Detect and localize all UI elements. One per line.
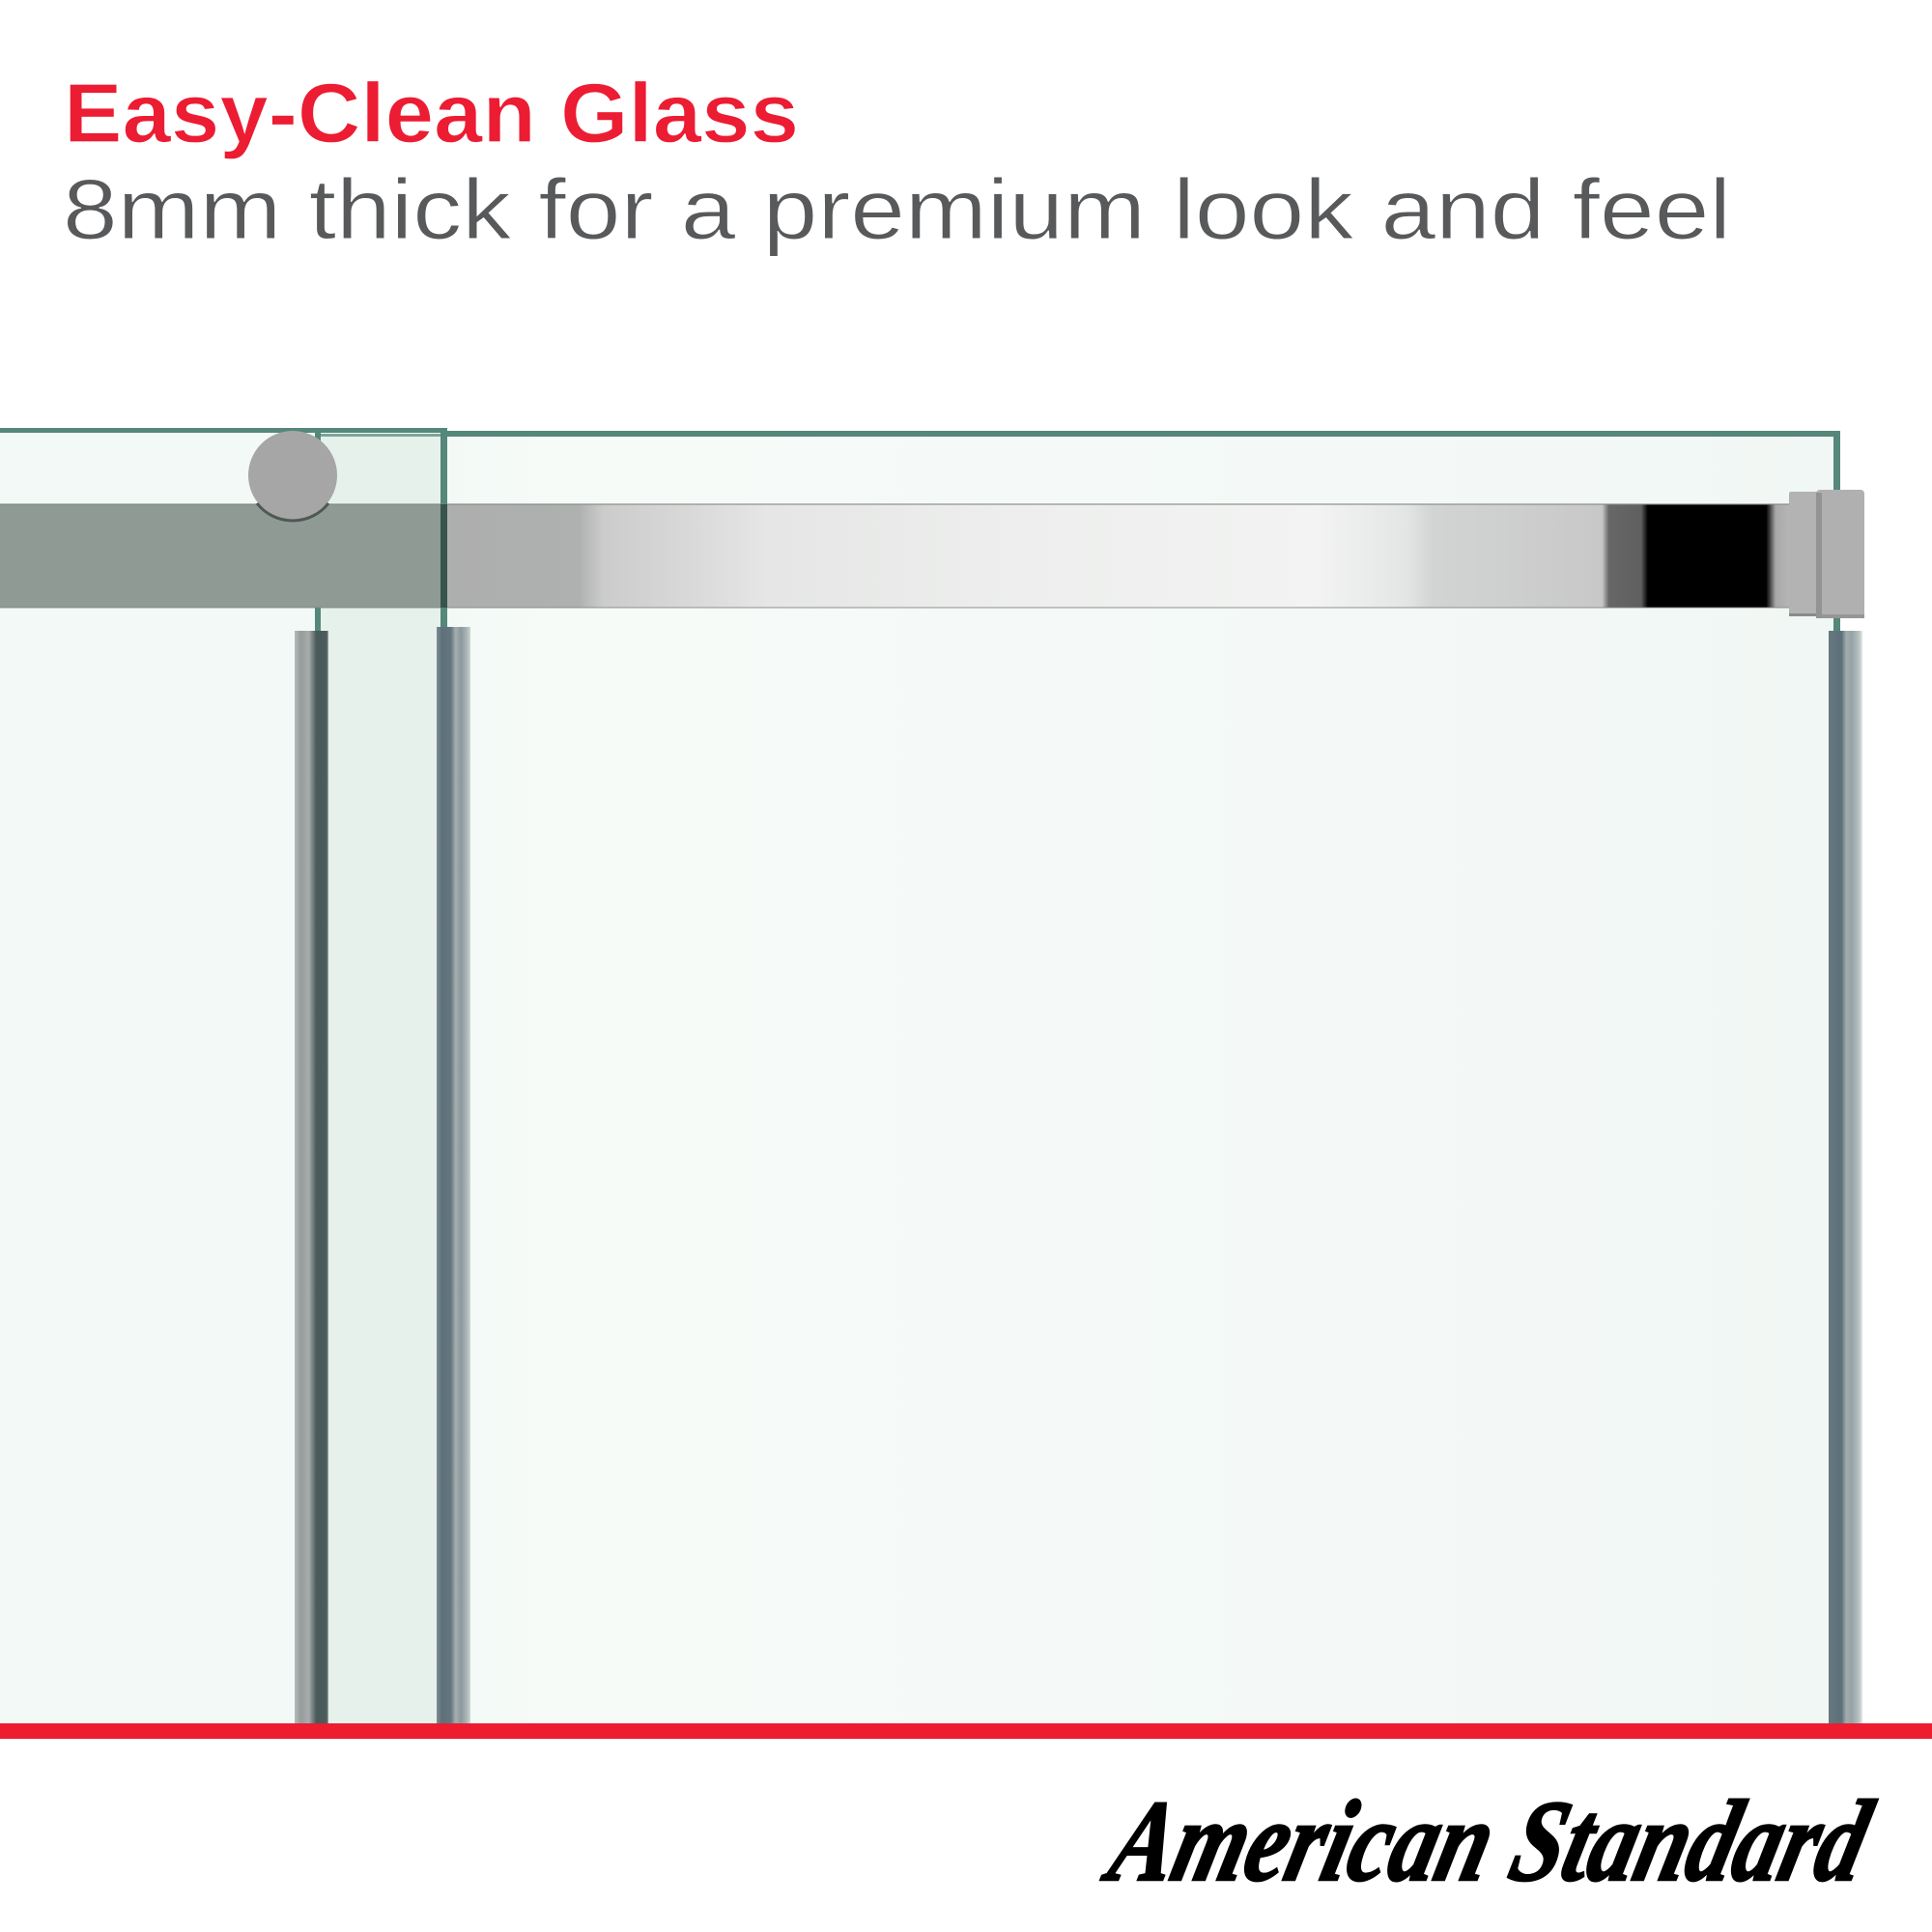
sliding rail: section behind door glass [0,504,444,608]
red divider line [0,1723,1932,1739]
vertical glass rod right [1829,631,1862,1723]
glass edge lines [0,428,1840,633]
glass edge over rail [440,504,447,608]
sliding rail: chrome section [444,504,1789,608]
roller wheel [248,431,337,521]
vertical glass rod middle [437,627,470,1723]
subtitle: 8mm thick for a premium look and feel [63,161,1731,257]
glass panels [0,431,1833,1723]
rail edge shading [0,503,1789,609]
title: Easy-Clean Glass [64,67,799,160]
end bracket [1789,490,1864,618]
vertical glass rod left [295,631,328,1723]
